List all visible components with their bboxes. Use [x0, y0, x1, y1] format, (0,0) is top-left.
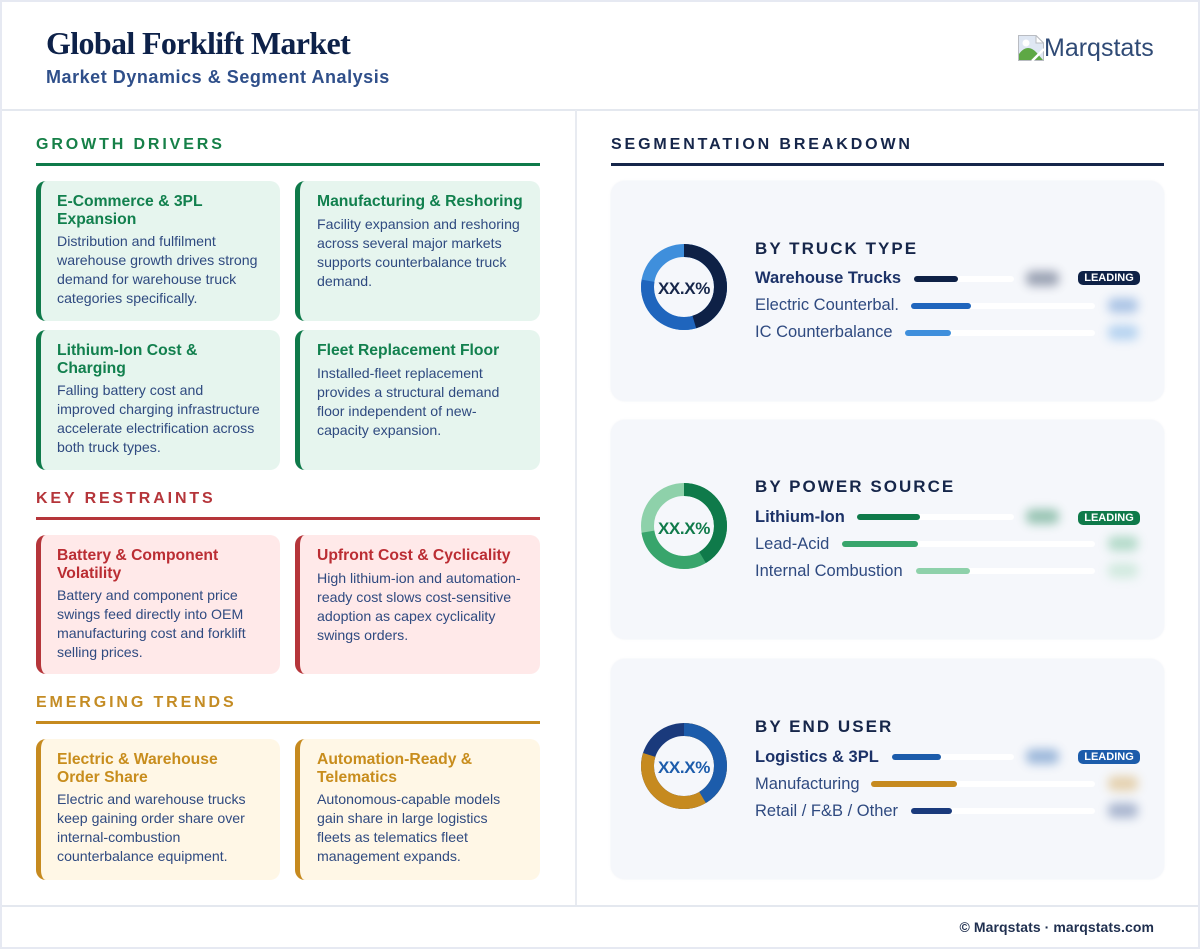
donut chart: XX.X%	[658, 758, 710, 777]
subtitle: Market Dynamics & Segment Analysis	[46, 67, 390, 87]
footer: © Marqstats · marqstats.com	[959, 919, 1154, 935]
donut chart: XX.X%	[658, 519, 710, 538]
donut chart	[641, 483, 727, 569]
card: upfront cost	[295, 535, 540, 674]
row: lead-acid: XX%	[1109, 536, 1137, 551]
donut chart: XX.X%	[658, 279, 710, 298]
card: electric	[36, 739, 280, 880]
card: electric: internal-combustion	[57, 829, 180, 845]
heading: segmentation breakdown: SEGMENTATION BREAKDOWN	[611, 136, 913, 153]
card: battery: Battery and component price	[57, 587, 238, 603]
row: lead-acid: Lead-Acid	[755, 535, 829, 553]
card: lithium-ion: Falling battery cost and	[57, 382, 203, 398]
card: lithium-ion: Lithium-Ion Cost &	[57, 342, 197, 359]
card: lithium-ion: accelerate electrification across	[57, 420, 254, 436]
card: battery: swings feed directly into OEM	[57, 606, 243, 622]
row: manufacturing: Manufacturing	[755, 775, 860, 793]
card: battery: Battery & Component	[57, 547, 218, 564]
card: battery: Volatility	[57, 565, 121, 582]
card: fleet replacement	[295, 330, 540, 470]
panel: by power source	[611, 420, 1164, 639]
row: warehouse trucks	[755, 264, 1140, 292]
card: e-commerce: demand for warehouse truck	[57, 271, 236, 287]
row: lead-acid	[755, 530, 1142, 556]
row: warehouse trucks: Warehouse Trucks	[755, 269, 901, 287]
card: automation: fleets as telematics fleet	[317, 829, 468, 845]
donut chart	[641, 244, 727, 330]
card: e-commerce: E-Commerce & 3PL	[57, 193, 203, 210]
card: e-commerce: categories specifically.	[57, 290, 197, 306]
card: electric: Electric & Warehouse	[57, 751, 218, 768]
card: automation: gain share in large logistics	[317, 810, 488, 826]
header	[46, 25, 1154, 87]
card: upfront cost: ready cost slows cost-sensitive	[317, 589, 511, 605]
card: e-commerce: Expansion	[57, 211, 136, 228]
row: internal combustion	[755, 560, 1140, 582]
heading: emerging trends	[36, 693, 540, 724]
heading: key restraints: KEY RESTRAINTS	[36, 490, 216, 507]
row: internal combustion: XX%	[1109, 563, 1137, 578]
row: logistics	[755, 742, 1140, 770]
card: battery: manufacturing cost and forklift	[57, 625, 246, 641]
row: retail: Retail / F&B / Other	[755, 802, 898, 820]
panel: by truck type	[611, 181, 1164, 401]
card: fleet replacement: provides a structural demand	[317, 384, 499, 400]
card: lithium-ion	[36, 330, 280, 470]
card: battery	[36, 535, 280, 674]
card: manufacturing	[295, 181, 540, 321]
card: upfront cost: Upfront Cost & Cyclicality	[317, 547, 511, 564]
title: Global Forklift Market	[46, 25, 350, 61]
card: e-commerce: warehouse growth drives strong	[57, 252, 257, 268]
card: lithium-ion: improved charging infrastructure	[57, 401, 260, 417]
card: lithium-ion: Charging	[57, 360, 126, 377]
row: electric counterbalance	[755, 292, 1143, 319]
heading: key restraints	[36, 489, 540, 520]
card: automation: management expands.	[317, 848, 461, 864]
row: ic counterbalance: XX%	[1109, 325, 1137, 340]
donut chart	[641, 723, 727, 809]
row: electric counterbalance: Electric Counterbal.	[755, 296, 899, 314]
row: electric counterbalance: XX%	[1109, 298, 1137, 313]
row: lithium-ion: LEADING	[1084, 512, 1134, 524]
heading: growth drivers	[36, 135, 540, 166]
card: fleet replacement: capacity expansion.	[317, 422, 441, 438]
card: electric: keep gaining order share over	[57, 810, 245, 826]
row: lithium-ion: Lithium-Ion	[755, 508, 845, 526]
row: manufacturing: XX%	[1109, 776, 1137, 791]
card: lithium-ion: both truck types.	[57, 439, 161, 455]
heading: segmentation breakdown	[611, 135, 1164, 166]
card: automation	[295, 739, 540, 880]
card: automation: Automation-Ready &	[317, 751, 472, 768]
card: e-commerce	[36, 181, 280, 321]
card: electric: Electric and warehouse trucks	[57, 791, 246, 807]
row: lithium-ion: XX%	[1028, 509, 1057, 524]
row: lithium-ion	[755, 502, 1140, 530]
row: ic counterbalance: IC Counterbalance	[755, 323, 893, 341]
row: ic counterbalance	[755, 320, 1142, 346]
card: battery: selling prices.	[57, 644, 143, 660]
card: fleet replacement: Fleet Replacement Floor	[317, 342, 499, 359]
card: upfront cost: adoption as capex cyclicality	[317, 608, 495, 624]
card: e-commerce: Distribution and fulfilment	[57, 233, 216, 249]
row: logistics: XX%	[1028, 749, 1057, 764]
row: logistics: Logistics & 3PL	[755, 748, 879, 766]
card: manufacturing: Facility expansion and reshoring	[317, 216, 520, 232]
card: manufacturing: supports counterbalance truck	[317, 254, 506, 270]
row: internal combustion: Internal Combustion	[755, 562, 903, 580]
heading: growth drivers: GROWTH DRIVERS	[36, 136, 225, 153]
card: electric: Order Share	[57, 769, 148, 786]
logo	[1018, 34, 1154, 62]
logo text: Marqstats	[1044, 34, 1154, 62]
row: retail	[755, 797, 1143, 824]
row: warehouse trucks: LEADING	[1084, 272, 1134, 284]
card: upfront cost: High lithium-ion and automation-	[317, 570, 521, 586]
icon: broken image	[1018, 35, 1044, 61]
row: warehouse trucks: XX%	[1028, 271, 1057, 286]
row: manufacturing	[755, 770, 1143, 797]
card: upfront cost: swings orders.	[317, 627, 408, 643]
heading: emerging trends: EMERGING TRENDS	[36, 694, 237, 711]
panel: by end user	[611, 659, 1164, 879]
card: automation: Telematics	[317, 769, 397, 786]
card: fleet replacement: floor independent of new-	[317, 403, 477, 419]
title: BY TRUCK TYPE	[755, 239, 918, 258]
card: electric: counterbalance equipment.	[57, 848, 228, 864]
card: manufacturing: Manufacturing & Reshoring	[317, 193, 523, 210]
card: manufacturing: demand.	[317, 273, 372, 289]
card: manufacturing: across several major markets	[317, 235, 502, 251]
row: retail: XX%	[1109, 803, 1137, 818]
card: automation: Autonomous-capable models	[317, 791, 500, 807]
title: BY END USER	[755, 717, 893, 736]
row: logistics: LEADING	[1084, 751, 1134, 763]
title: BY POWER SOURCE	[755, 477, 955, 496]
card: fleet replacement: Installed-fleet replacement	[317, 365, 483, 381]
